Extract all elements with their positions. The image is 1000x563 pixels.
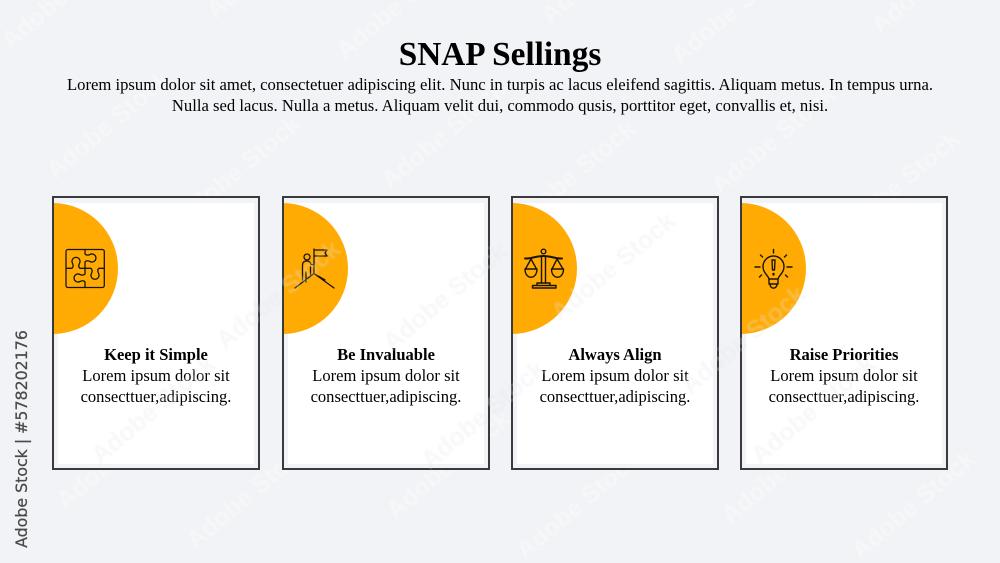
watermark pattern: Adobe Stock [511, 445, 646, 563]
watermark over panels: Adobe Stock [416, 355, 551, 475]
card text: Always Align [568, 345, 662, 364]
intro text: Nulla sed lacus. Nulla a metus. Aliquam velit dui, commodo qusis, porttitor eget, convallis et, nisi. [172, 96, 828, 115]
card text: Lorem ipsum dolor sit [541, 366, 689, 385]
card text: Be Invaluable [337, 345, 435, 364]
watermark over panels: Adobe Stock [378, 237, 513, 357]
card text [81, 345, 231, 406]
icon: flag on summit [294, 248, 335, 289]
card text: Lorem ipsum dolor sit [312, 366, 460, 385]
card text: consecttuer,adipiscing. [81, 387, 231, 406]
watermark pattern: Adobe Stock [846, 445, 981, 563]
title: SNAP Sellings [399, 36, 601, 73]
icon: light bulb [754, 248, 793, 289]
watermark pattern: Adobe Stock [706, 80, 841, 200]
card text: Raise Priorities [790, 345, 898, 364]
watermark over panels: Adobe Stock [546, 207, 681, 327]
watermark pattern: Adobe Stock [51, 395, 186, 515]
icon: balance scale [524, 248, 564, 289]
card text: Lorem ipsum dolor sit [82, 366, 230, 385]
card text: consecttuer,adipiscing. [311, 387, 461, 406]
watermark pattern: Adobe Stock [41, 65, 176, 185]
watermark pattern: Adobe Stock [506, 115, 641, 235]
watermark pattern: Adobe Stock [171, 110, 306, 230]
watermark pattern: Adobe Stock [381, 405, 516, 525]
intro text [67, 75, 933, 115]
stock credit: Adobe Stock | #578202176 [12, 330, 31, 548]
card text [311, 345, 461, 406]
card text [769, 345, 919, 406]
watermark over panels: Adobe Stock [86, 350, 221, 470]
watermark over panels: Adobe Stock [211, 235, 346, 355]
card text: Keep it Simple [104, 345, 208, 364]
card text: consecttuer,adipiscing. [769, 387, 919, 406]
watermark pattern: Adobe Stock [831, 125, 966, 245]
panel: always align [511, 196, 719, 470]
card text: consecttuer,adipiscing. [540, 387, 690, 406]
intro text: Lorem ipsum dolor sit amet, consectetuer adipiscing elit. Nunc in turpis ac lacus eleifend sagittis. Aliquam metus. In tempus urna. [67, 75, 933, 94]
watermark pattern: Adobe Stock [716, 410, 851, 530]
watermark over panels: Adobe Stock [676, 280, 811, 400]
panel: be invaluable [282, 196, 490, 470]
watermark over panels: Adobe Stock [746, 350, 881, 470]
panel: raise priorities [740, 196, 948, 470]
watermark pattern: Adobe Stock [376, 75, 511, 195]
icon: puzzle [65, 248, 105, 288]
card text [540, 345, 690, 406]
watermark pattern: Adobe Stock [181, 435, 316, 555]
panel: keep it simple [52, 196, 260, 470]
card text: Lorem ipsum dolor sit [770, 366, 918, 385]
